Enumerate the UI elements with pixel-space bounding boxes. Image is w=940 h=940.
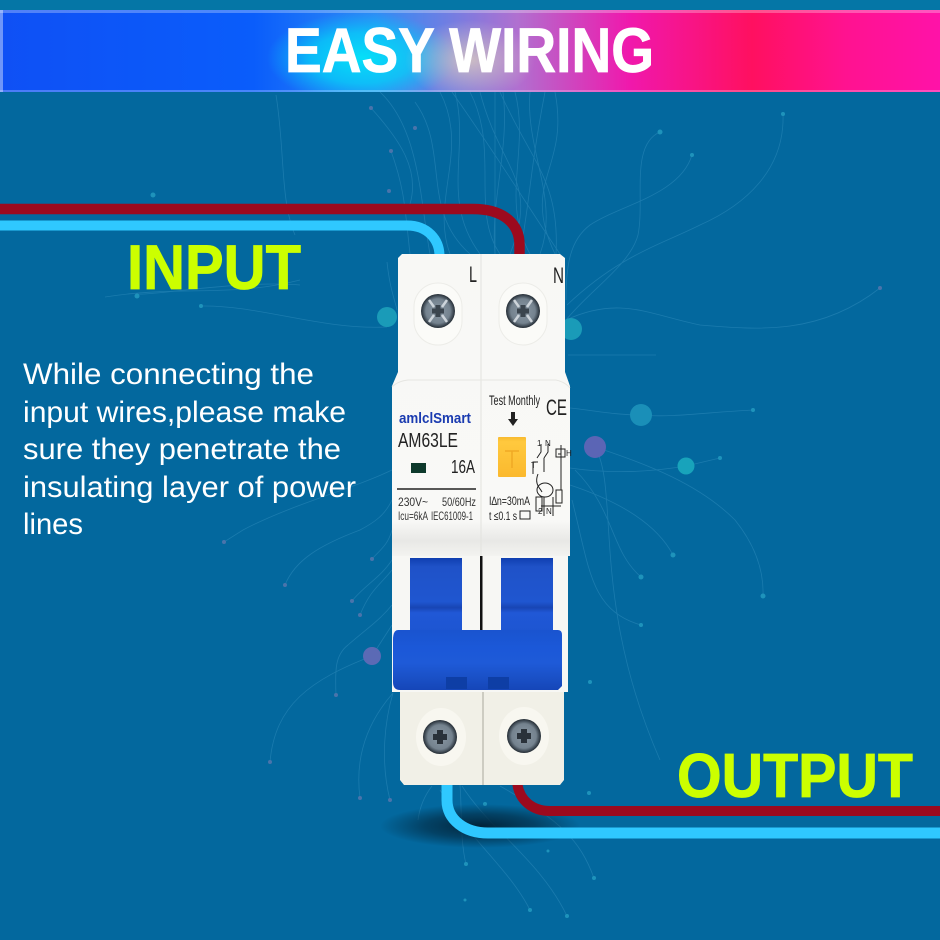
arrow (508, 412, 518, 426)
decorative network of lines and dots (105, 92, 880, 916)
breaker top terminal body (392, 254, 570, 556)
input instructions (23, 358, 356, 541)
input instructions: sure they penetrate the (23, 433, 341, 466)
large glowing circles (377, 307, 397, 327)
terminal labels: N (553, 263, 564, 288)
toggle bar (393, 630, 562, 690)
input instructions: lines (23, 508, 83, 541)
specs left: 50/60Hz (442, 495, 476, 509)
input heading: INPUT (127, 233, 301, 303)
switch well (392, 556, 568, 692)
terminal labels: L (469, 262, 477, 287)
output heading: OUTPUT (677, 742, 913, 811)
specs right (489, 494, 530, 523)
input instructions: While connecting the (23, 358, 314, 391)
terminal labels (469, 262, 564, 288)
input wires (0, 209, 520, 256)
specs right: t ≤0.1 s (489, 509, 517, 523)
bottom screws (416, 707, 549, 766)
output wires (447, 780, 940, 833)
circuit breaker: N (546, 507, 552, 516)
model: AM63LE (398, 430, 458, 452)
status window (411, 463, 426, 473)
top screws (414, 283, 547, 345)
specs left: 230V~ (398, 495, 428, 509)
brand: amlclSmart (399, 410, 471, 427)
circuit breaker: H (566, 449, 572, 458)
circuit breaker: N (545, 439, 551, 448)
rating: 16A (451, 457, 475, 477)
input instructions: insulating layer of power (23, 471, 356, 504)
specs right: I∆n=30mA (489, 494, 530, 508)
title: EASY WIRING (285, 16, 654, 86)
circuit breaker: 1 (537, 439, 542, 448)
title banner (0, 10, 940, 92)
specs left (398, 495, 476, 523)
circuit breaker (392, 254, 572, 785)
wiring schematic (533, 444, 565, 516)
specs left: IEC61009-1 (431, 509, 473, 523)
input instructions: input wires,please make (23, 396, 346, 429)
lower terminal body (400, 692, 564, 785)
specs left: Icu=6kA (398, 509, 428, 523)
blue handles (410, 558, 462, 631)
CE mark: CE (546, 395, 567, 420)
test button (498, 437, 526, 477)
circuit breaker: 2 (538, 507, 543, 516)
shadow under breaker (380, 804, 580, 848)
circuit breaker: T (531, 461, 536, 470)
test monthly label: Test Monthly (489, 392, 540, 408)
small nodes (134, 112, 785, 918)
